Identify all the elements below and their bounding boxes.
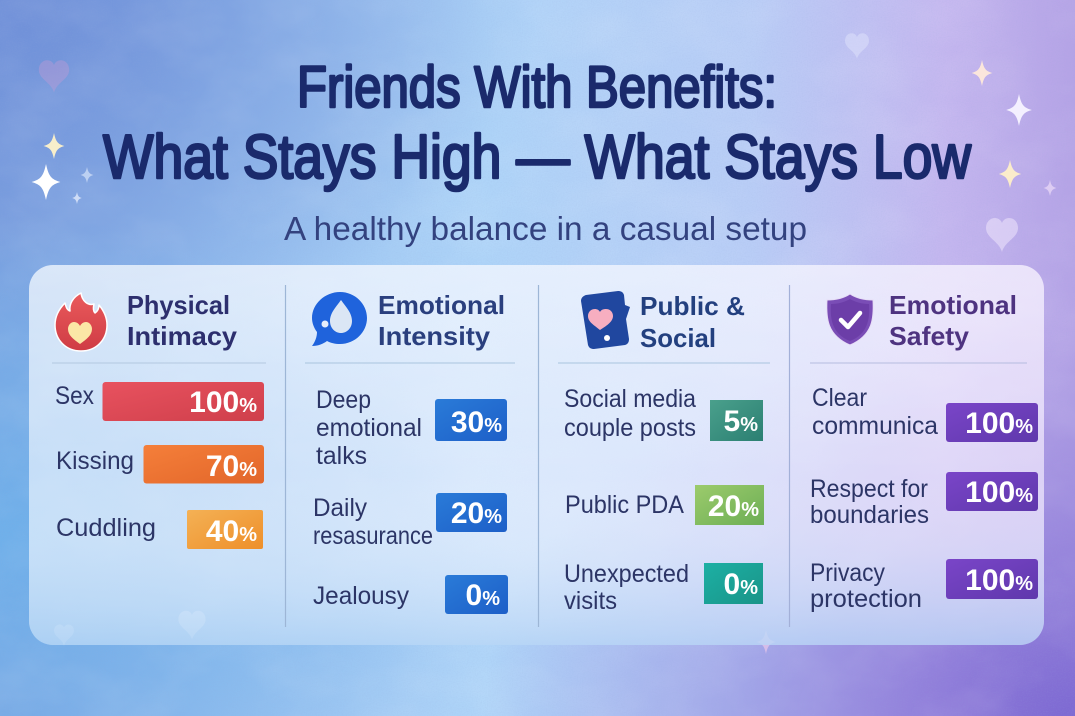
row: public PDA 20%: Public PDA xyxy=(565,491,684,519)
row: public PDA 20% xyxy=(565,485,764,525)
row: sex 100%: Sex xyxy=(55,382,94,410)
icon: chat bubble with drop xyxy=(312,292,367,346)
row: clear communication 100%: 100% xyxy=(965,407,1033,440)
heading xyxy=(889,290,1017,351)
heading: Safety xyxy=(889,321,970,351)
row: clear communication 100% xyxy=(812,384,1038,442)
row: privacy protection 100% xyxy=(810,559,1038,613)
row: daily reassurance 20%: resasurance xyxy=(313,522,433,550)
row: sex 100% xyxy=(55,382,264,421)
row: jealousy 0%: 0% xyxy=(466,579,500,612)
row: deep emotional talks 30%: Deep xyxy=(316,386,371,414)
row: privacy protection 100%: Privacy xyxy=(810,559,885,587)
row: respect for boundaries 100%: 100% xyxy=(965,476,1033,509)
panel: emotional safety xyxy=(810,290,1038,613)
row: social media couple posts 5% xyxy=(564,385,763,442)
row: jealousy 0%: Jealousy xyxy=(313,582,409,610)
row: deep emotional talks 30%: talks xyxy=(316,442,367,470)
row: clear communication 100%: Clear xyxy=(812,384,867,412)
row: kissing 70%: Kissing xyxy=(56,447,134,475)
row: unexpected visits 0%: visits xyxy=(564,587,617,615)
icon: phone with heart xyxy=(581,291,630,349)
row: social media couple posts 5%: couple posts xyxy=(564,414,696,442)
heading xyxy=(127,290,238,351)
row: unexpected visits 0%: 0% xyxy=(724,568,758,601)
row: cuddling 40%: 40% xyxy=(206,515,257,548)
row: jealousy 0% xyxy=(313,575,508,614)
icon: flame with heart xyxy=(55,293,107,351)
panel: public and social xyxy=(564,291,764,615)
title: Friends With Benefits: xyxy=(297,55,777,120)
title xyxy=(103,55,971,192)
icon: shield with check xyxy=(827,294,873,345)
row: sex 100%: 100% xyxy=(189,386,257,419)
row: privacy protection 100%: 100% xyxy=(965,564,1033,597)
row: social media couple posts 5%: Social media xyxy=(564,385,696,413)
row: unexpected visits 0% xyxy=(564,560,763,615)
row: deep emotional talks 30% xyxy=(316,386,507,470)
heading: Emotional xyxy=(889,290,1017,320)
row: social media couple posts 5%: 5% xyxy=(724,405,758,438)
row: unexpected visits 0%: Unexpected xyxy=(564,560,689,588)
heading: Public & xyxy=(640,291,745,321)
main card xyxy=(29,265,1044,645)
heading: Physical xyxy=(127,290,230,320)
row: deep emotional talks 30%: emotional xyxy=(316,414,422,442)
row: deep emotional talks 30%: 30% xyxy=(451,406,502,439)
row: respect for boundaries 100%: Respect for xyxy=(810,475,928,503)
row: daily reassurance 20%: Daily xyxy=(313,494,367,522)
row: daily reassurance 20%: 20% xyxy=(451,497,502,530)
heading xyxy=(640,291,745,353)
heading xyxy=(378,290,505,351)
row: respect for boundaries 100%: boundaries xyxy=(810,501,929,529)
panel: emotional intensity xyxy=(312,290,508,614)
row: daily reassurance 20% xyxy=(313,493,507,550)
panel: physical intimacy xyxy=(55,290,264,549)
row: cuddling 40% xyxy=(56,510,263,549)
row: kissing 70% xyxy=(56,445,264,484)
heading: Intimacy xyxy=(127,321,238,351)
row: clear communication 100%: communica xyxy=(812,412,938,440)
row: respect for boundaries 100% xyxy=(810,472,1038,529)
subtitle: A healthy balance in a casual setup xyxy=(284,210,807,247)
row: kissing 70%: 70% xyxy=(206,450,257,483)
row: privacy protection 100%: protection xyxy=(810,585,922,613)
heading: Emotional xyxy=(378,290,505,320)
row: cuddling 40%: Cuddling xyxy=(56,514,156,542)
heading: Social xyxy=(640,323,716,353)
row: public PDA 20%: 20% xyxy=(708,490,759,523)
heading: Intensity xyxy=(378,321,491,351)
